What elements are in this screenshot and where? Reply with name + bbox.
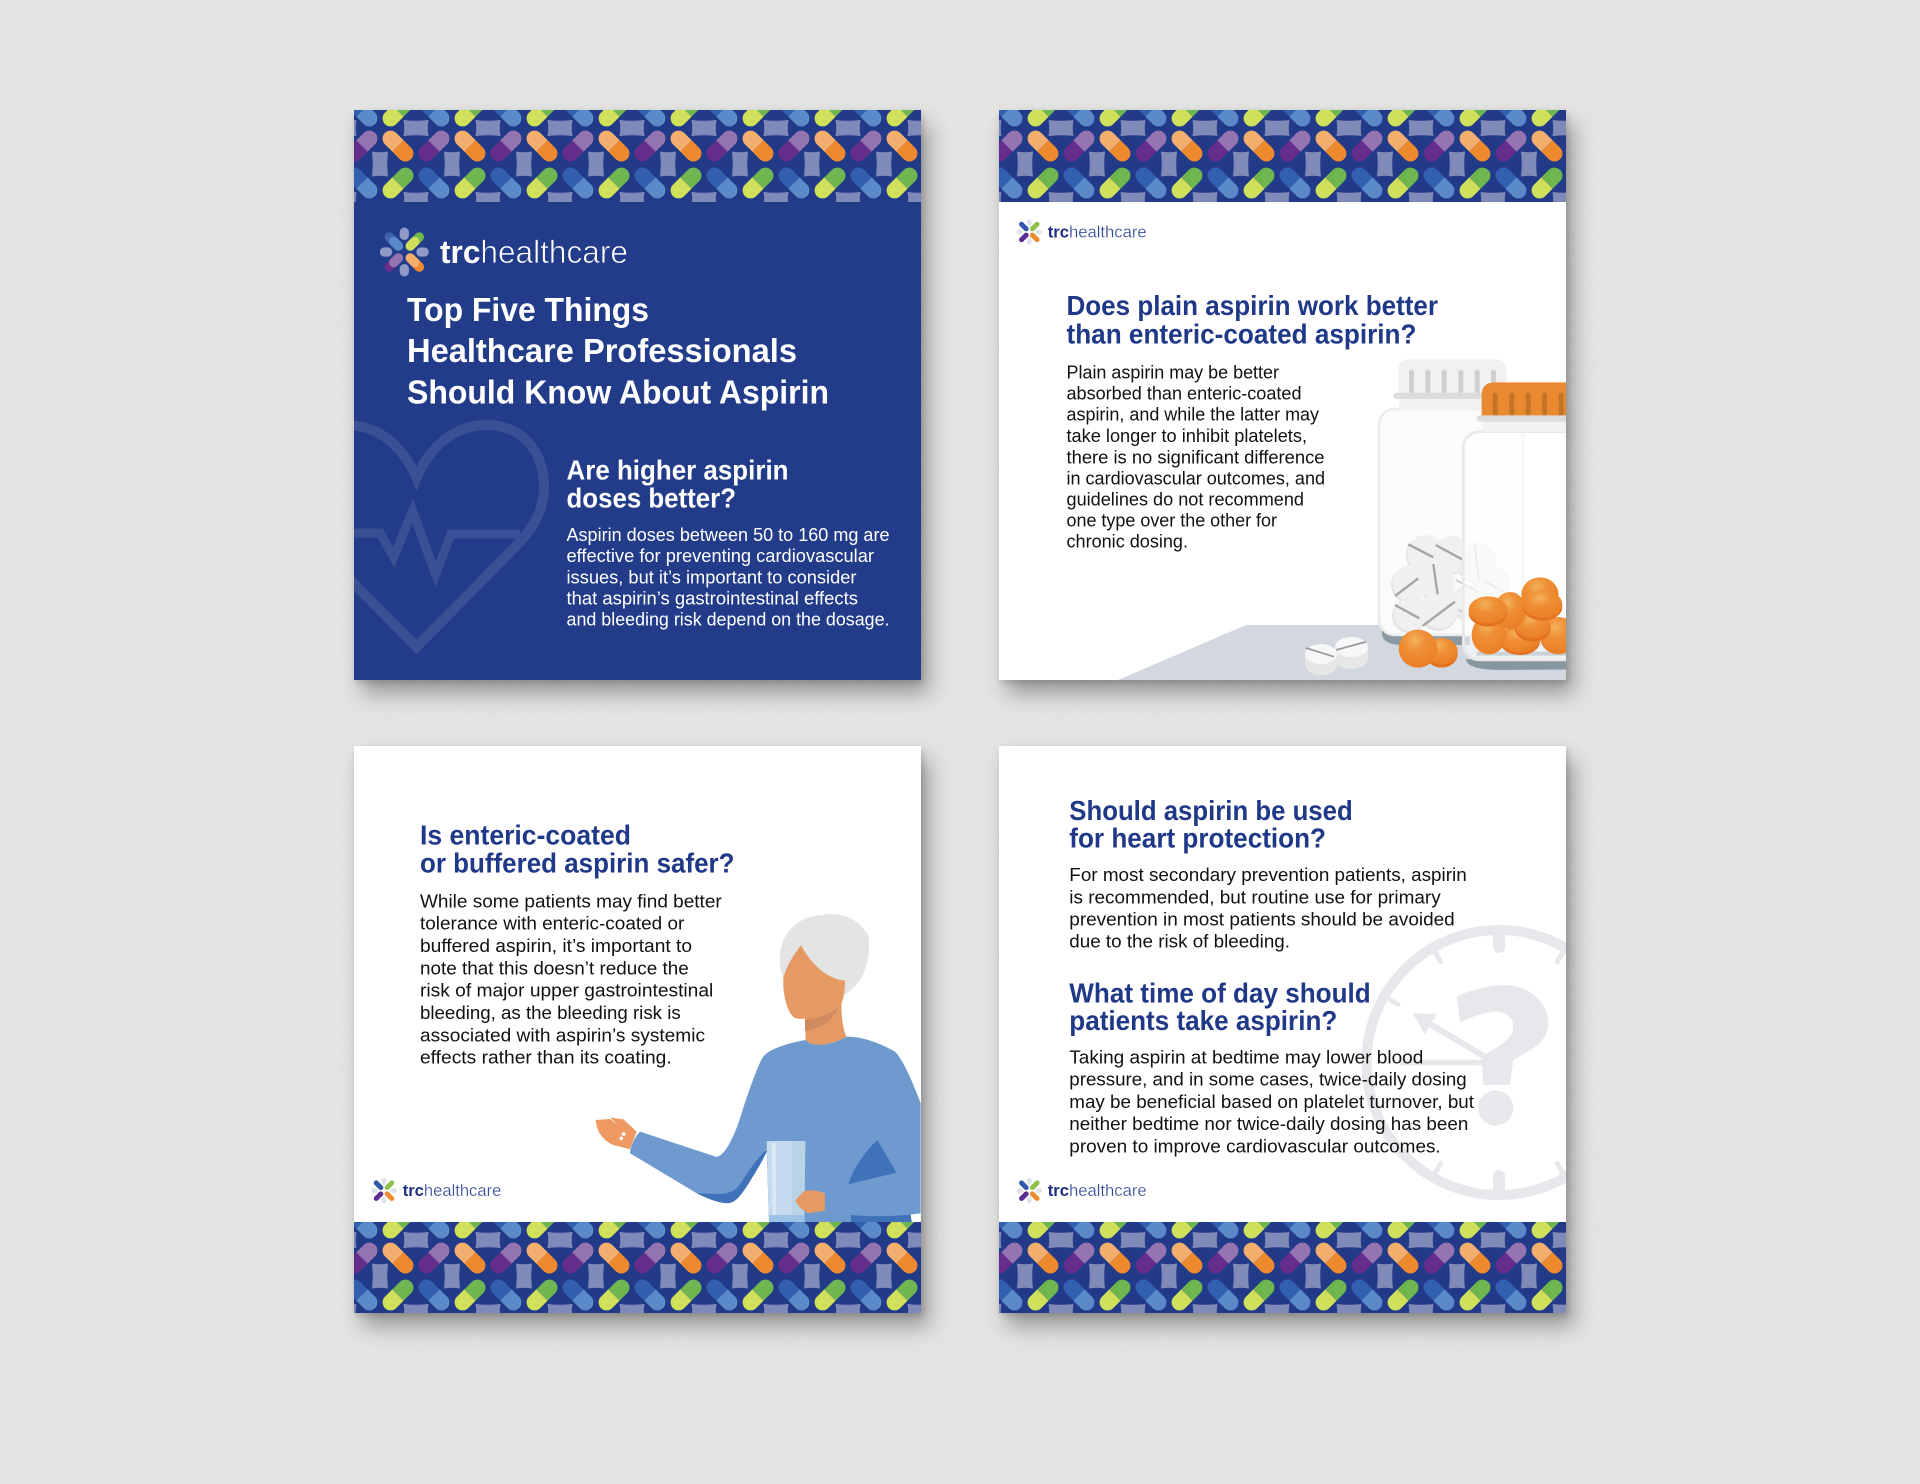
panel: plain versus enteric-coated aspirin xyxy=(999,110,1566,680)
pattern band: pills xyxy=(999,110,1566,202)
title: Should Know About Aspirin xyxy=(407,374,829,412)
illustration: table surface xyxy=(1118,625,1566,680)
heading: heart protection xyxy=(1069,795,1353,854)
icon: heart with pulse line xyxy=(289,425,544,647)
text block: plain aspirin body: there is no significant difference xyxy=(1066,446,1324,467)
text block: heart protection body: is recommended, but routine use for primary xyxy=(1069,886,1442,907)
logo: trchealthcare xyxy=(1017,219,1147,245)
text block: heart protection body: For most secondary prevention patients, aspirin xyxy=(1069,864,1467,885)
text block: dosage body: issues, but it’s important to consider xyxy=(566,568,856,588)
text block: time of day body: neither bedtime nor twice-daily dosing has been xyxy=(1069,1113,1468,1134)
text block: time of day body: pressure, and in some cases, twice-daily dosing xyxy=(1069,1069,1467,1090)
text block: dosage body: effective for preventing cardiovascular xyxy=(566,546,874,566)
heading: are higher aspirin doses better: Are higher aspirin xyxy=(566,455,788,486)
heading: plain aspirin: than enteric-coated aspirin? xyxy=(1066,318,1416,349)
text block: plain aspirin body: one type over the other for xyxy=(1066,510,1277,531)
text block: plain aspirin body: in cardiovascular outcomes, and xyxy=(1066,467,1325,488)
heading: are higher aspirin doses better: doses better? xyxy=(566,483,736,514)
text block: dosage body: Aspirin doses between 50 to 160 mg are xyxy=(566,525,890,545)
text block: enteric-coated body: risk of major upper gastrointestinal xyxy=(420,980,713,1001)
illustration: white tablets on table xyxy=(1305,637,1368,675)
text block: plain aspirin body: guidelines do not recommend xyxy=(1066,489,1304,510)
text block: time of day body: proven to improve cardiovascular outcomes. xyxy=(1069,1135,1441,1156)
heading: heart protection: Should aspirin be used xyxy=(1069,795,1353,826)
logo: trchealthcare: trchealthcare xyxy=(403,1181,501,1200)
heading: heart protection: for heart protection? xyxy=(1069,823,1326,854)
text block: enteric-coated body: bleeding, as the bleeding risk is xyxy=(420,1002,681,1023)
panel: enteric-coated or buffered aspirin xyxy=(354,746,921,1313)
panel: heart protection and time of day xyxy=(999,746,1566,1313)
heading: plain aspirin xyxy=(1066,290,1438,349)
heading: enteric-coated safety xyxy=(420,819,734,878)
illustration: orange pills xyxy=(1399,577,1577,668)
pattern band: pills xyxy=(354,1222,921,1314)
text block: dosage body: and bleeding risk depend on the dosage. xyxy=(566,610,890,630)
text block: dosage body: that aspirin’s gastrointestinal effects xyxy=(566,588,858,608)
logo: trchealthcare xyxy=(371,1178,501,1203)
text block: plain aspirin body: aspirin, and while the latter may xyxy=(1066,404,1320,425)
text block: heart protection body xyxy=(1069,864,1467,952)
logo: trchealthcare xyxy=(1017,1178,1147,1203)
text block: enteric-coated body: note that this doesn’t reduce the xyxy=(420,957,689,978)
text block: enteric-coated body: tolerance with enteric-coated or xyxy=(420,913,684,934)
logo: trchealthcare: trchealthcare xyxy=(1048,223,1147,242)
heading: time of day: What time of day should xyxy=(1069,977,1371,1008)
heading: enteric-coated safety: or buffered aspirin safer? xyxy=(420,847,734,878)
text block: heart protection body: prevention in most patients should be avoided xyxy=(1069,909,1455,930)
pattern band: pills xyxy=(354,110,921,202)
text block: enteric-coated body: While some patients may find better xyxy=(420,890,722,911)
heading: are higher aspirin doses better xyxy=(566,455,788,514)
text block: plain aspirin body: absorbed than enteric-coated xyxy=(1066,382,1302,403)
text block: heart protection body: due to the risk of bleeding. xyxy=(1069,931,1290,952)
heading: plain aspirin: Does plain aspirin work better xyxy=(1066,290,1438,321)
logo: trchealthcare xyxy=(380,228,628,276)
text block: plain aspirin body: Plain aspirin may be better xyxy=(1066,361,1279,382)
text block: enteric-coated body: associated with aspirin’s systemic xyxy=(420,1024,705,1045)
illustration: white pill bottle xyxy=(1379,359,1523,645)
illustration: clear bottle with orange cap xyxy=(1463,382,1623,670)
icon: clock with question mark xyxy=(1366,930,1632,1195)
text block: plain aspirin body: take longer to inhibit platelets, xyxy=(1066,425,1307,446)
illustration: person holding a glass xyxy=(596,914,921,1223)
text block: time of day body xyxy=(1069,1046,1474,1156)
text block: time of day body: Taking aspirin at bedtime may lower blood xyxy=(1069,1046,1423,1067)
logo: trchealthcare: trchealthcare xyxy=(1048,1181,1147,1200)
title: Healthcare Professionals xyxy=(407,333,797,370)
text block: dosage body xyxy=(566,525,890,630)
text block: enteric-coated body xyxy=(420,890,722,1068)
heading: time of day: patients take aspirin? xyxy=(1069,1005,1337,1036)
title: Top Five Things xyxy=(407,292,649,329)
text block: enteric-coated body: buffered aspirin, it’s important to xyxy=(420,935,692,956)
pattern band: pills xyxy=(999,1222,1566,1314)
text block: time of day body: may be beneficial based on platelet turnover, but xyxy=(1069,1091,1474,1112)
text block: plain aspirin body xyxy=(1066,361,1325,552)
text block: enteric-coated body: effects rather than its coating. xyxy=(420,1047,672,1068)
text block: plain aspirin body: chronic dosing. xyxy=(1066,531,1188,552)
title xyxy=(407,292,829,412)
logo: trchealthcare: trchealthcare xyxy=(440,234,628,270)
panel: are higher aspirin doses better xyxy=(354,110,921,680)
heading: time of day xyxy=(1069,977,1371,1036)
heading: enteric-coated safety: Is enteric-coated xyxy=(420,819,631,850)
illustration: white tablets in bottle xyxy=(1391,535,1510,633)
